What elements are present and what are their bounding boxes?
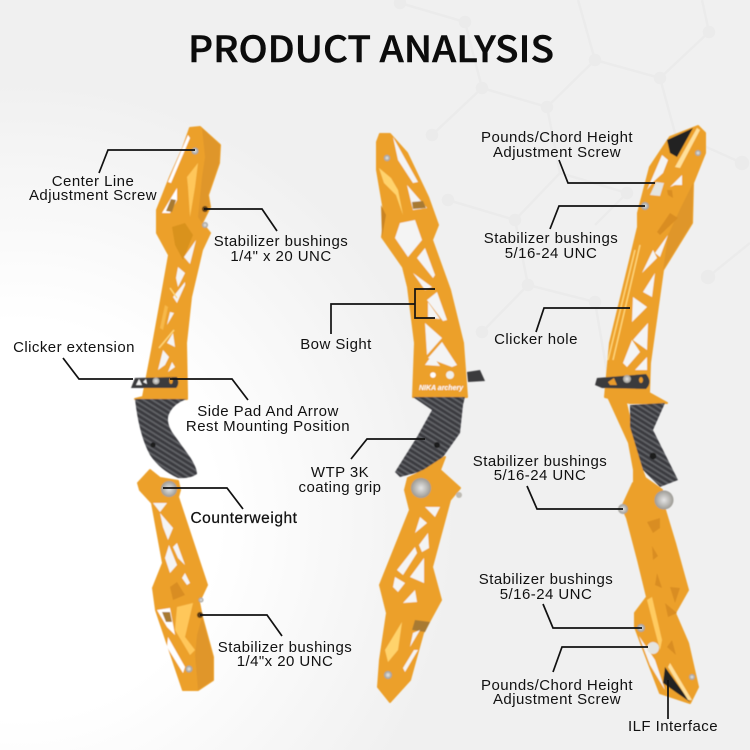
upper holes <box>393 137 418 183</box>
label: pounds adjustment top: Pounds/Chord Height <box>481 129 633 146</box>
label: clicker hole: Clicker hole <box>494 331 578 348</box>
upper limb body <box>135 127 220 399</box>
label: pounds adjustment bottom: Pounds/Chord Height <box>481 677 633 694</box>
label: stabilizer bushings upper left: Stabilizer bushings <box>214 233 348 250</box>
label: clicker extension: Clicker extension <box>13 339 135 356</box>
brand mark: NIKA archery <box>419 385 464 392</box>
left bow riser <box>131 127 220 690</box>
label: stabilizer bushings lower left: Stabilizer bushings <box>218 639 352 656</box>
lower limb body <box>138 470 213 690</box>
lower holes <box>153 503 167 512</box>
lower screws <box>161 481 177 497</box>
lower limb <box>378 457 460 702</box>
label: side pad and arrow rest: Rest Mounting Position <box>186 418 350 435</box>
label: grip: WTP 3K <box>311 464 369 481</box>
leader lines <box>63 150 668 719</box>
label: counterweight: Counterweight <box>190 510 298 527</box>
carbon grip <box>135 399 197 478</box>
label: pounds adjustment bottom: Adjustment Screw <box>493 691 621 708</box>
center bow riser <box>377 134 485 702</box>
label: grip: coating grip <box>299 479 381 496</box>
label: side pad and arrow rest: Side Pad And Arrow <box>197 403 339 420</box>
title: PRODUCT ANALYSIS <box>188 21 554 73</box>
label: pounds adjustment top: Adjustment Screw <box>493 144 621 161</box>
label: stabilizer bushings right lower: Stabilizer bushings <box>479 571 613 588</box>
gold strip beside grip <box>607 397 650 488</box>
carbon grip <box>395 397 465 477</box>
upper holes <box>168 135 190 183</box>
right bow riser <box>595 126 705 703</box>
label: bow sight: Bow Sight <box>300 336 372 353</box>
label: center line adjustment screw: Adjustment Screw <box>29 187 157 204</box>
lower limb <box>622 478 698 703</box>
label: stabilizer bushings lower left: 1/4"x 20 UNC <box>237 653 333 670</box>
label: stabilizer bushings right top: 5/16-24 UNC <box>505 245 597 262</box>
label: stabilizer bushings right middle: Stabilizer bushings <box>473 453 607 470</box>
label: stabilizer bushings right lower: 5/16-24 UNC <box>500 586 592 603</box>
screws <box>192 148 198 154</box>
label: stabilizer bushings upper left: 1/4" x 20 UNC <box>230 248 332 265</box>
label: ILF interface: ILF Interface <box>628 718 718 735</box>
label: stabilizer bushings right top: Stabilizer bushings <box>484 230 618 247</box>
hexagon network pattern <box>395 0 750 390</box>
clicker extension plate <box>595 374 650 389</box>
label: center line adjustment screw: Center Line <box>52 173 134 190</box>
label: stabilizer bushings right middle: 5/16-24 UNC <box>494 467 586 484</box>
sight bracket <box>467 370 485 382</box>
carbon grip <box>630 403 678 487</box>
clicker extension plate <box>131 377 178 388</box>
